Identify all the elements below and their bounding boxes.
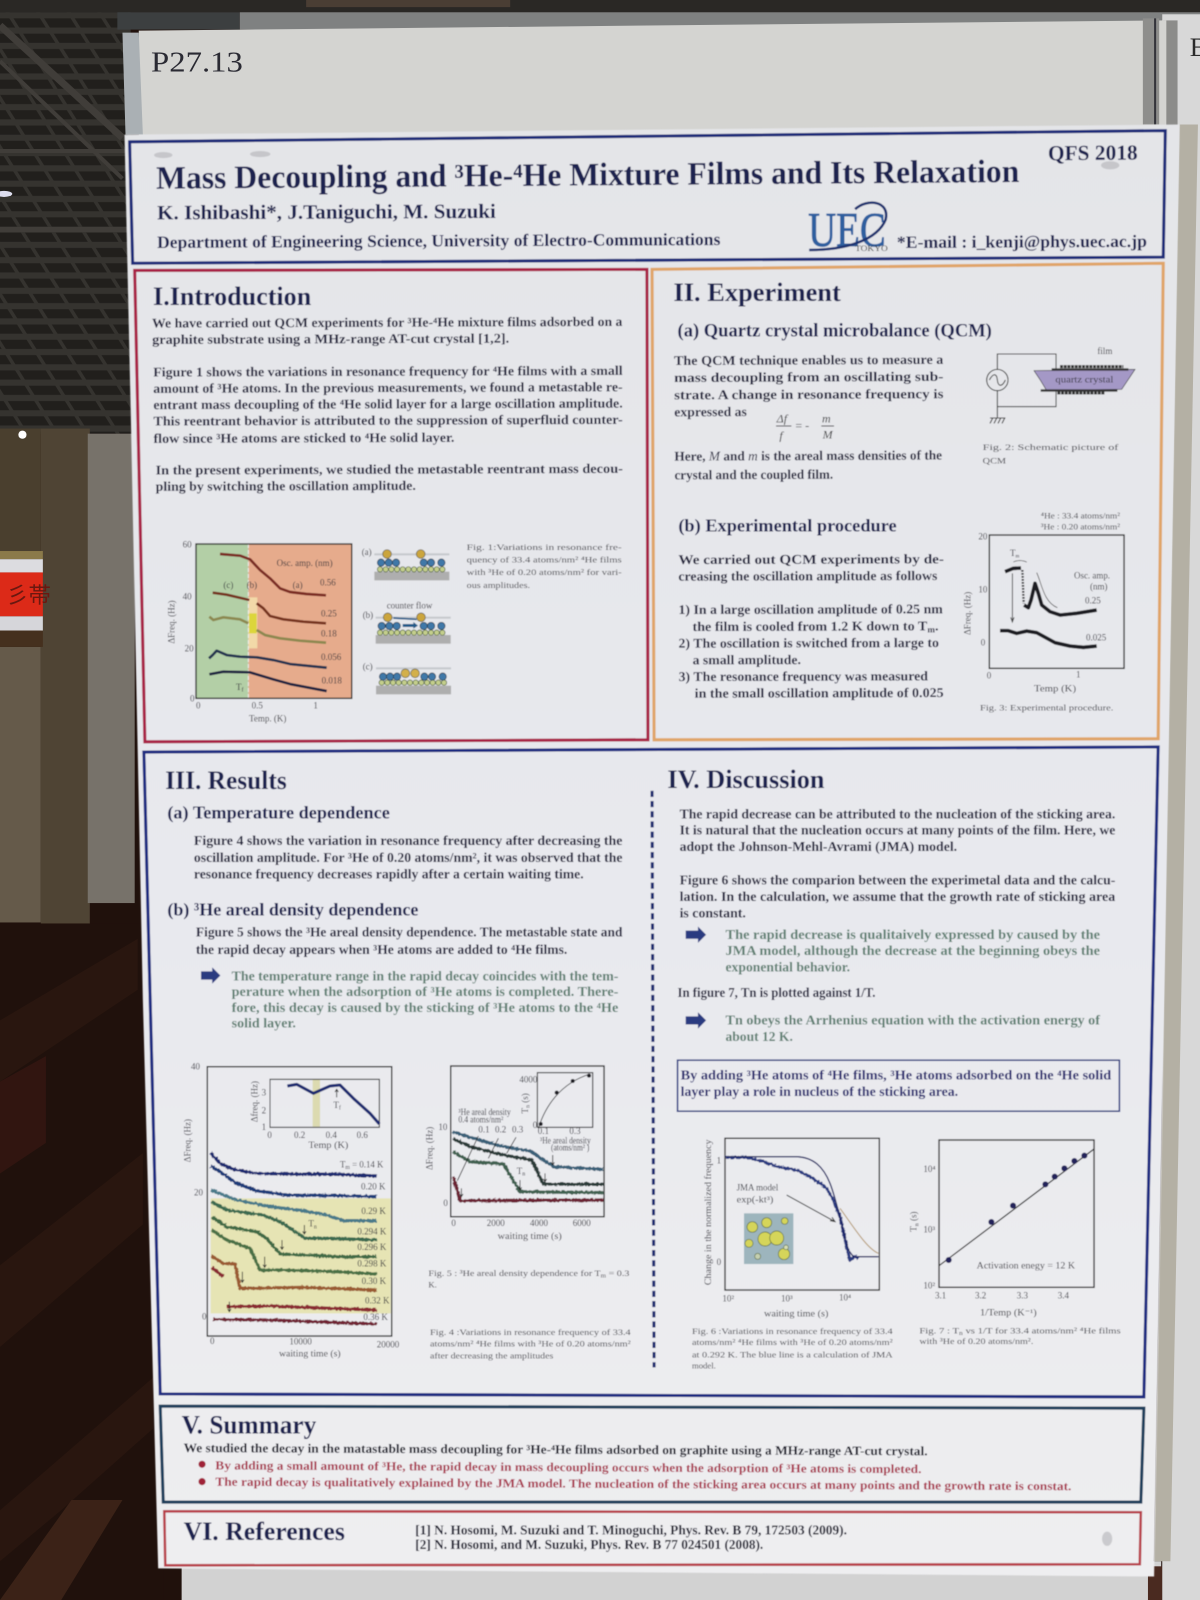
caption: figure 2: QCM [983, 455, 1006, 465]
figure 3: procedure chart: m [1016, 554, 1020, 559]
inset chart: temperature sweep: 0.2 [294, 1130, 305, 1140]
subheading: areal density dependence: (b) ³He areal density dependence [167, 899, 418, 920]
chart: figure 4 [183, 1061, 400, 1359]
conclusion text: Arrhenius: Tn obeys the Arrhenius equation with the activation energy of [726, 1012, 1101, 1027]
QCM text: mass decoupling from an oscillating sub- [674, 369, 943, 385]
inset: nucleation sites [744, 1213, 793, 1264]
text: areal density dependence: Figure 5 shows the ³He areal density dependence. The metastable state and [196, 925, 623, 940]
section content [674, 346, 1135, 713]
chart: figure 4: = 0.14 K [350, 1159, 384, 1169]
caption: figure 4: after decreasing the amplitudes [430, 1350, 554, 1360]
equation: delta f over f [776, 412, 834, 442]
chart: figure 4: 20 [194, 1187, 204, 1197]
inset chart: Tn vs density: 0.1 [538, 1126, 549, 1136]
procedure text: 2) The oscillation is switched from a large to [679, 635, 939, 651]
chart: figure 4: n [314, 1224, 317, 1230]
conclusion text: Arrhenius [726, 1012, 1101, 1044]
inset chart: Tn vs density: 0 [533, 1120, 538, 1130]
reference list [415, 1523, 847, 1552]
chart: figure 7: 10⁴ [923, 1164, 935, 1174]
caption: figure 4: atoms/nm² ⁴He films with ³He of 0.20 atoms/nm² [430, 1339, 631, 1349]
schematic: (a) film state [362, 547, 449, 580]
figure 3: procedure chart: ⁴He : 33.4 atoms/nm² [1041, 510, 1120, 520]
panel: III. Results and IV. Discussion [144, 747, 1158, 1397]
caption: figure 1: ous amplitudes. [467, 580, 530, 590]
callout: layer play a role in nucleus of the sticking area. [681, 1084, 958, 1099]
chart: figure 5: 0.2 [495, 1125, 506, 1135]
figure 1: chart and schematics [167, 539, 622, 723]
inset chart: Tn vs density: ³He areal density [540, 1135, 591, 1145]
procedure text: a small amplitude. [693, 652, 801, 667]
chart: frequency vs temperature: ΔFreq. (Hz) [167, 600, 177, 644]
inset chart: Tn vs density: 4000 [519, 1075, 538, 1085]
introduction text: pling by switching the oscillation amplitude. [156, 478, 416, 494]
QCM text [674, 352, 944, 482]
bullet point 1: By adding a small amount of ³He, the rapid decay in mass decoupling occurs when the adsorption of ³He atoms is completed. [215, 1458, 921, 1476]
procedure text: the film is cooled from 1.2 K down to T [692, 618, 914, 634]
inset chart: temperature sweep: 1 [262, 1122, 266, 1132]
figure 3: procedure chart: 0.25 [1085, 595, 1101, 605]
chart: figure 6: 10³ [781, 1293, 793, 1303]
QCM text: The QCM technique enables us to measure a [674, 352, 944, 368]
chart: figure 5: waiting time (s) [498, 1231, 562, 1241]
equation: delta f over f: Δf [776, 412, 789, 426]
inset chart: temperature sweep: 0.4 [326, 1130, 337, 1140]
chart: frequency vs temperature: (b) [247, 580, 257, 590]
chart: figure 5: 0 [451, 1218, 456, 1228]
summary text: We studied the decay in the matastable mass decoupling for ³He-⁴He films adsorbed on graphite using a MHz-range AT-cut crystal. [184, 1441, 928, 1458]
heading: Experiment: II. Experiment [673, 277, 841, 307]
subheading: procedure: (b) Experimental procedure [678, 516, 897, 537]
chart: figure 7: 3.1 [935, 1290, 946, 1300]
procedure text: . [935, 618, 939, 633]
figure 3: procedure chart: 10 [978, 584, 988, 594]
chart: frequency vs temperature: (c) [223, 580, 233, 590]
procedure text: in the small oscillation amplitude of 0.025 [695, 685, 944, 701]
chart: figure 7: T [909, 1226, 919, 1232]
QCM text: strate. A change in resonance frequency is [674, 386, 944, 402]
chart: figure 7: 3.4 [1058, 1290, 1069, 1300]
text: figure 7 intro: In figure 7, Tn is plotted against 1/T. [678, 985, 876, 1000]
chart: figure 7: 3.2 [975, 1290, 986, 1300]
chart: figure 5: n [522, 1172, 525, 1178]
chart: frequency vs temperature: 0 [190, 694, 195, 704]
chart: figure 5: 6000 [573, 1218, 591, 1228]
inset chart: Tn vs density: n [526, 1105, 532, 1108]
conference tag: QFS 2018 [1048, 141, 1138, 165]
chart: frequency vs temperature: 0 [196, 700, 201, 710]
chart: figure 4: 0 [210, 1336, 215, 1346]
chart: frequency vs temperature: 40 [183, 591, 192, 601]
procedure text: m [927, 624, 936, 634]
chart: figure 4: 0.29 K [361, 1206, 386, 1216]
equation: delta f over f: f [779, 428, 784, 442]
figure 3: procedure chart: 0 [987, 671, 992, 681]
chart: figure 6: Change in the normalized frequency [703, 1139, 713, 1285]
caption: figure 1: with ³He of 0.20 atoms/nm² for vari- [467, 567, 622, 577]
chart: figure 6: JMA model [737, 1183, 779, 1193]
chart: figure 4: ΔFreq. (Hz) [183, 1119, 193, 1162]
figure 2: QCM schematic: film [1097, 346, 1112, 356]
inset chart: Tn vs density [519, 1073, 593, 1153]
chart: frequency vs temperature: 0.18 [321, 629, 337, 639]
chart: figure 5: ³He areal density [458, 1107, 511, 1117]
chart: figure 6: 10⁴ [839, 1293, 851, 1303]
chart: figure 6: exp(-kt³) [737, 1195, 773, 1205]
caption: figure 7: vs 1/T for 33.4 atoms/nm² ⁴He films [963, 1325, 1121, 1335]
figure 3: procedure chart: 20 [978, 531, 988, 541]
heading: References: VI. References [184, 1516, 345, 1546]
poster number: P27.13 [151, 47, 243, 78]
heading: Discussion: IV. Discussion [667, 764, 825, 794]
equation: delta f over f: M [822, 428, 834, 442]
caption: figure 7: n [959, 1331, 963, 1337]
procedure text [678, 551, 944, 701]
chart: figure 5: 10 [438, 1122, 448, 1132]
reference list: [2] N. Hosomi, and M. Suzuki, Phys. Rev. B 77 024501 (2008). [415, 1537, 763, 1552]
title: Mass Decoupling and ³He-⁴He Mixture Films and Its Relaxation [156, 154, 1019, 197]
QCM text: crystal and the coupled film. [674, 467, 833, 482]
panel: I. Introduction [135, 269, 648, 742]
chart: frequency vs temperature: 0.25 [321, 609, 337, 619]
figure 3: procedure chart: ³He : 0.20 atoms/nm² [1041, 522, 1120, 532]
inset chart: temperature sweep: T [333, 1100, 339, 1110]
chart: figure 4: 20000 [377, 1339, 400, 1349]
figures 6 and 7 [692, 1138, 1121, 1371]
conclusion text: temperature range: solid layer. [232, 1016, 296, 1031]
chart: figure 5: 2000 [487, 1218, 505, 1228]
inset chart: Tn vs density: 0.3 [569, 1126, 581, 1136]
conclusion text: temperature range: The temperature range in the rapid decay coincides with the tem- [232, 969, 618, 984]
conclusion text: Arrhenius: about 12 K. [726, 1029, 793, 1044]
inset chart: temperature sweep [249, 1079, 379, 1150]
caption: figure 2: Fig. 2: Schematic picture of [983, 442, 1119, 452]
chart: figure 4: T [308, 1219, 314, 1229]
chart: frequency vs temperature: 0.056 [321, 652, 342, 662]
inset chart: temperature sweep: 2 [262, 1105, 266, 1115]
chart: figure 5: 0.4 atoms/nm² [458, 1114, 504, 1124]
chart: figure 4: 0.32 K [365, 1295, 390, 1305]
text: comparison: is constant. [680, 905, 746, 920]
inset chart: Tn vs density: (atoms/nm² ) [551, 1143, 589, 1153]
chart: figure 5: 0.3 [512, 1125, 524, 1135]
chart: figure 5: 4000 [530, 1218, 549, 1228]
text: temperature dependence: Figure 4 shows the variation in resonance frequency after decreasing the [194, 833, 623, 848]
callout: By adding ³He atoms of ⁴He films, ³He atoms adsorbed on the ⁴He solid [681, 1068, 1112, 1083]
figures 4 and 5 [183, 1061, 632, 1360]
conclusion text: temperature range [232, 969, 618, 1031]
chart: frequency vs temperature: 1 [313, 700, 318, 710]
conclusion text: JMA: JMA model, although the decrease at the beginning obeys the [726, 943, 1100, 958]
equation: delta f over f: = - [795, 418, 809, 432]
authors: K. Ishibashi*, J.Taniguchi, M. Suzuki [157, 201, 496, 224]
email: *E-mail : i_kenji@phys.uec.ac.jp [897, 232, 1147, 252]
heading: Summary: V. Summary [182, 1410, 316, 1440]
figure 2: QCM schematic: quartz crystal [1055, 375, 1114, 385]
chart: figure 5: 0.1 [478, 1125, 490, 1135]
figure 3: procedure chart: Osc. amp. [1074, 571, 1110, 581]
chart: frequency vs temperature: T [236, 682, 242, 692]
caption: figure 6: atoms/nm² ⁴He films with ³He of 0.20 atoms/nm² [692, 1337, 893, 1347]
chart: figure 6: 10² [722, 1293, 734, 1303]
chart: figure 5 [424, 1066, 604, 1241]
heading: Introduction: I.Introduction [153, 281, 311, 311]
chart: figure 4: 0 [202, 1311, 207, 1321]
chart: figure 5: ΔFreq. (Hz) [424, 1127, 434, 1170]
chart: figure 6: 1 [717, 1155, 721, 1165]
schematic: (c) stuck state [363, 661, 451, 694]
chart: figure 4: 0.36 K [363, 1312, 388, 1322]
chart: figure 4: 0.298 K [357, 1259, 387, 1269]
chart: figure 7: Activation enegy = 12 K [977, 1260, 1076, 1270]
text: temperature dependence: resonance frequency decreases rapidly after a certain waiting time. [194, 867, 584, 882]
procedure text: 3) The resonance frequency was measured [679, 668, 929, 684]
introduction text [152, 314, 623, 494]
chart: figure 5: 0 [443, 1198, 448, 1208]
chart: figure 6: waiting time (s) [764, 1309, 828, 1319]
panel: II. Experiment [652, 263, 1163, 740]
text: comparison [680, 873, 1116, 920]
chart: frequency vs temperature: Osc. amp. (nm) [277, 558, 333, 568]
bullet point 2: The rapid decay is qualitatively explained by the JMA model. The nucleation of the sticking area occurs at many points and the growth rate is constat. [215, 1475, 1071, 1493]
chart: frequency vs temperature: 0.56 [320, 577, 336, 587]
chart: figure 7: n [914, 1223, 920, 1226]
chart: figure 7: (s) [909, 1212, 919, 1223]
chart: figure 4: 40 [191, 1061, 201, 1071]
text: areal density dependence: the rapid decay appears when ³He atoms are added to ⁴He films. [196, 942, 567, 957]
figure 3: procedure chart: Temp (K) [1034, 683, 1076, 693]
figure 3: procedure chart: ΔFreq. (Hz) [963, 592, 973, 635]
text: comparison: lation. In the calculation, we assume that the growth rate of sticking area [680, 889, 1116, 904]
chart: figure 4: 0.30 K [362, 1276, 387, 1286]
text: nucleation: The rapid decrease can be attributed to the nucleation of the sticking area. [680, 806, 1115, 821]
chart: figure 7 [909, 1140, 1094, 1318]
caption: figure 6: at 0.292 K. The blue line is a calculation of JMA [692, 1350, 894, 1360]
panel: VI. References [164, 1511, 1141, 1565]
chart: figure 7: 3.3 [1017, 1290, 1028, 1300]
poster sheet [124, 124, 1180, 1577]
venue background: 彡帯 [6, 583, 51, 608]
icon: arrow [686, 1012, 706, 1029]
chart: figure 6 [703, 1138, 879, 1319]
introduction text: In the present experiments, we studied the metastable reentrant mass decou- [156, 461, 623, 477]
QCM text: Here, M and m is the areal mass densities of the [674, 448, 942, 464]
title panel [130, 131, 1165, 263]
figure 2: QCM schematic [987, 346, 1135, 423]
procedure text: creasing the oscillation amplitude as follows [678, 568, 937, 584]
introduction text: graphite substrate using a MHz-range AT-cut crystal [1,2]. [152, 331, 509, 347]
callout [678, 1060, 1119, 1111]
caption: figure 5: = 0.3 [606, 1268, 629, 1278]
chart: frequency vs temperature: f [242, 687, 244, 694]
introduction text: flow since ³He atoms are sticked to ⁴He solid layer. [153, 430, 454, 446]
figure 3: procedure chart: T [1010, 548, 1016, 558]
caption: figure 6: model. [692, 1361, 716, 1371]
introduction text: Figure 1 shows the variations in resonance frequency for ⁴He films with a small [153, 363, 623, 380]
caption: figure 5 [428, 1268, 629, 1290]
icon: UEC logo: TOKYO [855, 244, 888, 253]
caption: figure 4: Fig. 4 :Variations in resonance frequency of 33.4 [430, 1327, 632, 1337]
affiliation: Department of Engineering Science, University of Electro-Communications [157, 230, 721, 252]
icon: UEC logo: UEC [808, 202, 886, 257]
chart: frequency vs temperature: (a) [293, 580, 303, 590]
text: temperature dependence: oscillation amplitude. For ³He of 0.20 atoms/nm², it was observed that the [194, 850, 623, 865]
introduction text: amount of ³He atoms. In the previous measurements, we found a metastable re- [153, 379, 623, 396]
chart: figure 5: T [517, 1166, 522, 1176]
subheading: temperature dependence: (a) Temperature dependence [167, 802, 390, 823]
chart: figure 4: 0.20 K [361, 1181, 386, 1191]
text: areal density dependence [196, 925, 623, 957]
figure 3: procedure chart [963, 510, 1124, 693]
text: comparison: Figure 6 shows the comparion between the experimetal data and the calcu- [680, 873, 1115, 888]
inset chart: temperature sweep: Temp (K) [308, 1140, 348, 1150]
introduction text: We have carried out QCM experiments for ³He-⁴He mixture films adsorbed on a [152, 314, 623, 331]
caption: figure 1 [467, 542, 622, 590]
chart: figure 6: 0 [717, 1257, 722, 1267]
chart: figure 7: 1/Temp (K⁻¹) [980, 1308, 1037, 1318]
caption: figure 4 [430, 1327, 632, 1360]
caption: figure 5: m [601, 1274, 606, 1280]
caption: figure 6: Fig. 6 :Variations in resonance frequency of 33.4 [692, 1326, 893, 1336]
figure 3: procedure chart: 1 [1076, 669, 1081, 679]
schematic: (b) counter flow [363, 600, 451, 644]
caption: figure 5: K. [428, 1280, 437, 1290]
caption: figure 2 [983, 442, 1119, 465]
equation: delta f over f: m [822, 412, 831, 426]
chart: figure 4: m [345, 1165, 350, 1171]
icon: arrow [686, 927, 706, 943]
schematic: (b) counter flow: (b) [363, 610, 373, 620]
caption: figure 7: with ³He of 0.20 atoms/nm². [919, 1336, 1033, 1346]
conclusion text: JMA: exponential behavior. [726, 959, 850, 974]
conclusion text: temperature range: fore, this decay is caused by the sticking of ³He atoms to the ⁴He [232, 1000, 618, 1015]
chart: figure 4: 0.296 K [357, 1242, 387, 1252]
chart: frequency vs temperature: 60 [183, 539, 192, 549]
procedure text: We carried out QCM experiments by de- [678, 551, 944, 567]
chart: figure 4: waiting time (s) [279, 1349, 341, 1359]
inset chart: Tn vs density: T [520, 1108, 530, 1113]
caption: figure 7 [919, 1325, 1121, 1346]
caption: figure 5: Fig. 5 : ³He areal density dependence for T [428, 1268, 577, 1278]
text: temperature dependence [194, 833, 623, 882]
inset chart: temperature sweep: 3 [262, 1088, 267, 1098]
figure 3: procedure chart: 0.025 [1086, 633, 1107, 643]
schematic: (c) stuck state: (c) [363, 661, 373, 671]
inset chart: temperature sweep: f [339, 1105, 341, 1112]
inset chart: temperature sweep: Δfreq. (Hz) [249, 1081, 259, 1122]
chart: figure 4: 10000 [289, 1337, 312, 1347]
introduction text: This reentrant behavior is attributed to the suppression of superfluid counter- [153, 412, 623, 429]
QCM text: expressed as [674, 404, 747, 419]
conclusion text: JMA [726, 927, 1100, 974]
conclusion text: temperature range: perature when the adsorption of ³He atoms is completed. There- [232, 984, 618, 999]
chart: figure 4: T [340, 1159, 346, 1169]
chart: frequency vs temperature [167, 539, 352, 723]
figure 3: procedure chart: (nm) [1090, 581, 1108, 591]
chart: frequency vs temperature: 20 [185, 643, 194, 653]
chart: figure 4: 0.294 K [357, 1226, 387, 1236]
caption: figure 1: Fig. 1:Variations in resonance fre- [467, 542, 622, 552]
chart: figure 7: 10² [923, 1281, 935, 1291]
text: nucleation: It is natural that the nucleation occurs at many points of the film. Here, we [680, 823, 1115, 838]
subheading: QCM: (a) Quartz crystal microbalance (QCM) [678, 321, 992, 342]
schematic: (b) counter flow: counter flow [387, 600, 433, 610]
caption: figure 1: quency of 33.4 atoms/nm² ⁴He films [467, 554, 622, 564]
chart: frequency vs temperature: Temp. (K) [249, 713, 286, 723]
caption: figure 3: Fig. 3: Experimental procedure. [980, 703, 1113, 713]
procedure text: 1) In a large oscillation amplitude of 0.25 nm [678, 601, 943, 617]
icon: arrow [201, 967, 220, 984]
caption: figure 6 [692, 1326, 894, 1371]
caption: figure 7: Fig. 7 : T [919, 1325, 951, 1335]
inset chart: temperature sweep: 0 [267, 1130, 272, 1140]
figure 3: procedure chart: 0 [981, 638, 986, 648]
chart: frequency vs temperature: 0.018 [322, 675, 342, 685]
upper board with poster number [122, 18, 1166, 138]
chart: figure 7: 10³ [923, 1225, 935, 1235]
chart: frequency vs temperature: 0.5 [252, 700, 263, 710]
schematic: (a) film state: (a) [362, 547, 372, 557]
heading: Results: III. Results [165, 765, 287, 795]
inset chart: temperature sweep: 0.6 [357, 1130, 368, 1140]
text: nucleation: adopt the Johnson-Mehl-Avrami (JMA) model. [680, 839, 957, 854]
text: nucleation [680, 806, 1115, 854]
inset chart: Tn vs density: (s) [520, 1093, 530, 1105]
conclusion text: JMA: The rapid decrease is qualitaively expressed by caused by the [726, 927, 1100, 942]
introduction text: entrant mass decoupling of the ⁴He solid layer for a large oscillation amplitude. [153, 396, 623, 412]
reference list: [1] N. Hosomi, M. Suzuki and T. Minoguchi, Phys. Rev. B 79, 172503 (2009). [415, 1523, 847, 1538]
panel: V. Summary [160, 1406, 1144, 1502]
